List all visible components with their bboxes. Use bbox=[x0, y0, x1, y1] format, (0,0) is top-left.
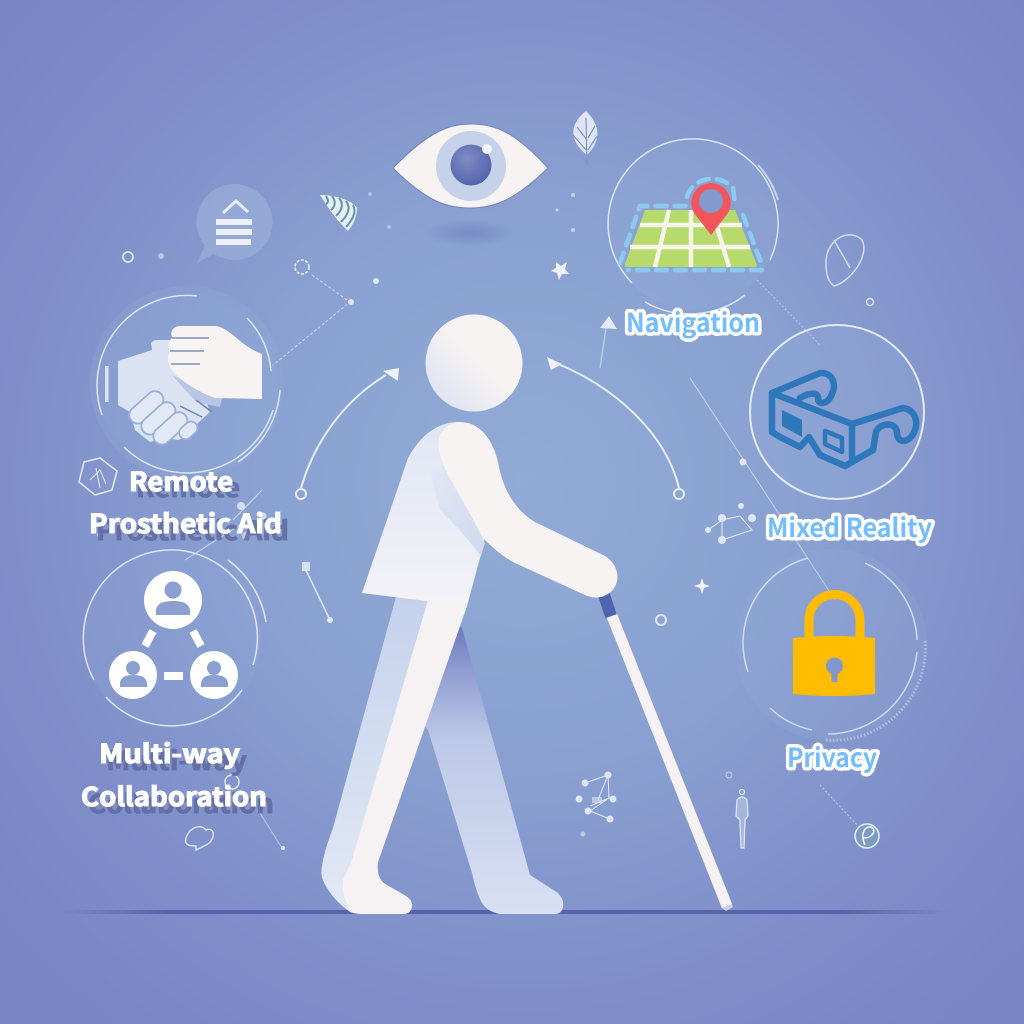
panel: remote prosthetic aid bbox=[90, 286, 284, 480]
label: multi-way collaboration: Multi-way bbox=[99, 734, 240, 771]
icon: map with pin bbox=[620, 179, 762, 270]
label: multi-way collaboration bbox=[81, 734, 274, 821]
ring: privacy circle bbox=[743, 558, 917, 734]
torso bbox=[362, 422, 490, 606]
label: remote prosthetic aid: Prosthetic Aid bbox=[96, 511, 289, 548]
panel: navigation bbox=[607, 139, 778, 314]
icon: striped shell bbox=[320, 195, 357, 231]
head bbox=[426, 314, 522, 412]
front leg bbox=[321, 597, 467, 914]
label: remote prosthetic aid: Prosthetic Aid bbox=[89, 504, 282, 541]
ground line bbox=[60, 910, 950, 914]
icon: padlock bbox=[793, 595, 875, 696]
label: remote prosthetic aid: Remote bbox=[136, 468, 240, 505]
ring: hand circle bbox=[97, 295, 280, 473]
arm bbox=[438, 422, 617, 598]
icon: small standing person bbox=[736, 790, 748, 848]
cane bbox=[612, 616, 727, 906]
icon: eye bbox=[393, 124, 548, 247]
label: privacy: Privacy bbox=[787, 738, 877, 775]
decorative constellation lines and dots bbox=[79, 192, 874, 850]
arrow: small up arrow to navigation bbox=[600, 316, 617, 368]
icon: leaf bbox=[573, 111, 597, 166]
panel: privacy bbox=[735, 549, 927, 741]
icon: 3d glasses bbox=[772, 373, 916, 466]
label: multi-way collaboration: Collaboration bbox=[88, 784, 274, 821]
label: multi-way collaboration: Multi-way bbox=[106, 741, 247, 778]
icon: speech bubble with list bbox=[196, 184, 272, 263]
panel: mixed reality bbox=[750, 325, 924, 499]
icon: circular p badge bbox=[855, 824, 879, 848]
arrow: right arc to head bbox=[547, 357, 684, 499]
label: mixed reality: Mixed Reality bbox=[767, 508, 932, 545]
label: remote prosthetic aid: Remote bbox=[129, 462, 233, 499]
label: navigation: Navigation bbox=[626, 303, 760, 340]
icon: three connected people bbox=[109, 571, 238, 699]
icon: handshake bbox=[118, 326, 262, 448]
back leg bbox=[420, 610, 563, 914]
figure: walking person with cane bbox=[321, 314, 733, 914]
label: multi-way collaboration: Collaboration bbox=[81, 777, 267, 814]
panel: multi-way collaboration bbox=[83, 550, 266, 728]
ring: collaboration circle bbox=[83, 550, 266, 726]
ring: navigation circle bbox=[608, 139, 778, 314]
arrow: left arc to head bbox=[296, 368, 399, 499]
ring: glasses circle bbox=[750, 325, 924, 499]
label: remote prosthetic aid bbox=[89, 462, 289, 548]
